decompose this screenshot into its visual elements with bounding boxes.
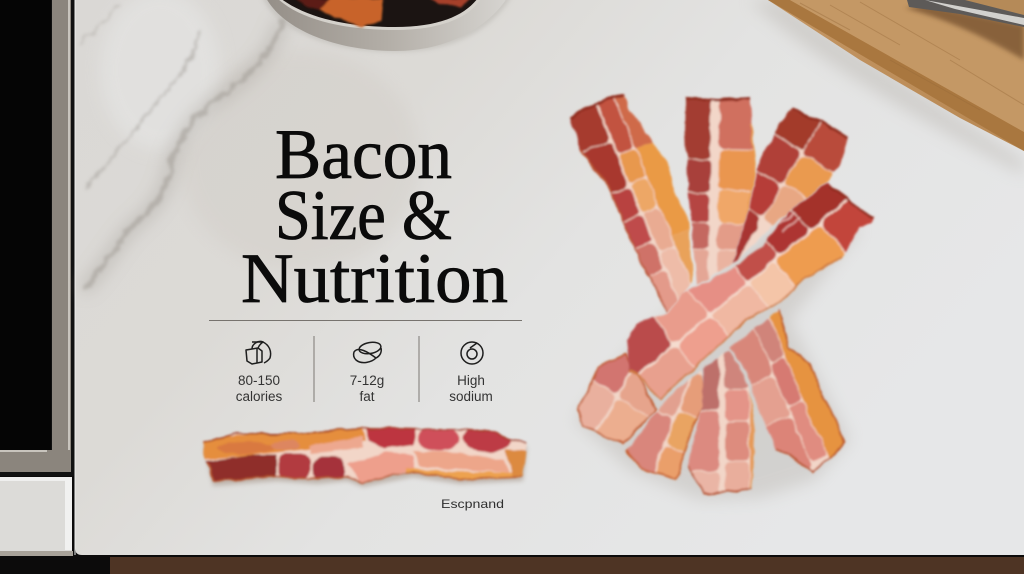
bacon pile	[568, 92, 876, 502]
stat: calories: 80-150	[238, 373, 280, 388]
stat: fat: fat	[359, 389, 375, 404]
bacon strip: lower centre	[686, 350, 756, 497]
bacon strip: lower centre left	[624, 370, 704, 482]
stat: calories: calories	[236, 389, 283, 404]
stat: calories	[236, 341, 283, 404]
wooden cutting board with knife	[750, 0, 1024, 175]
soft pile shadow	[575, 200, 860, 500]
bacon strip: lower left	[576, 351, 658, 446]
title: Size &	[275, 177, 452, 255]
stat: sodium: sodium	[449, 389, 493, 404]
icon: calories cube	[246, 341, 271, 364]
separator	[418, 336, 420, 402]
title: Nutrition	[241, 240, 508, 318]
stat: fat: 7-12g	[350, 373, 384, 388]
stat: sodium: High	[457, 373, 485, 388]
oven appliance at left	[0, 0, 74, 556]
stat: fat	[350, 341, 384, 404]
caption: Escpnand	[441, 497, 504, 511]
icon: sodium	[461, 342, 483, 364]
title	[241, 116, 508, 318]
icon: fat	[354, 341, 382, 363]
bowl of bacon at top	[262, 0, 512, 52]
separator	[314, 336, 315, 402]
bacon strip: top left	[568, 92, 695, 314]
title: Bacon	[275, 116, 452, 194]
knife	[907, 0, 1024, 27]
bacon strip: top right	[732, 106, 850, 264]
bacon strip: lower right	[728, 308, 847, 474]
bacon strip: top middle	[682, 95, 758, 286]
single flat bacon strip	[202, 424, 529, 489]
bacon piece in bowl	[296, 0, 472, 27]
divider rule under title	[209, 320, 522, 321]
bacon strip: crossing diagonal	[626, 182, 876, 402]
stat: sodium	[449, 342, 493, 404]
stats row	[236, 336, 493, 404]
